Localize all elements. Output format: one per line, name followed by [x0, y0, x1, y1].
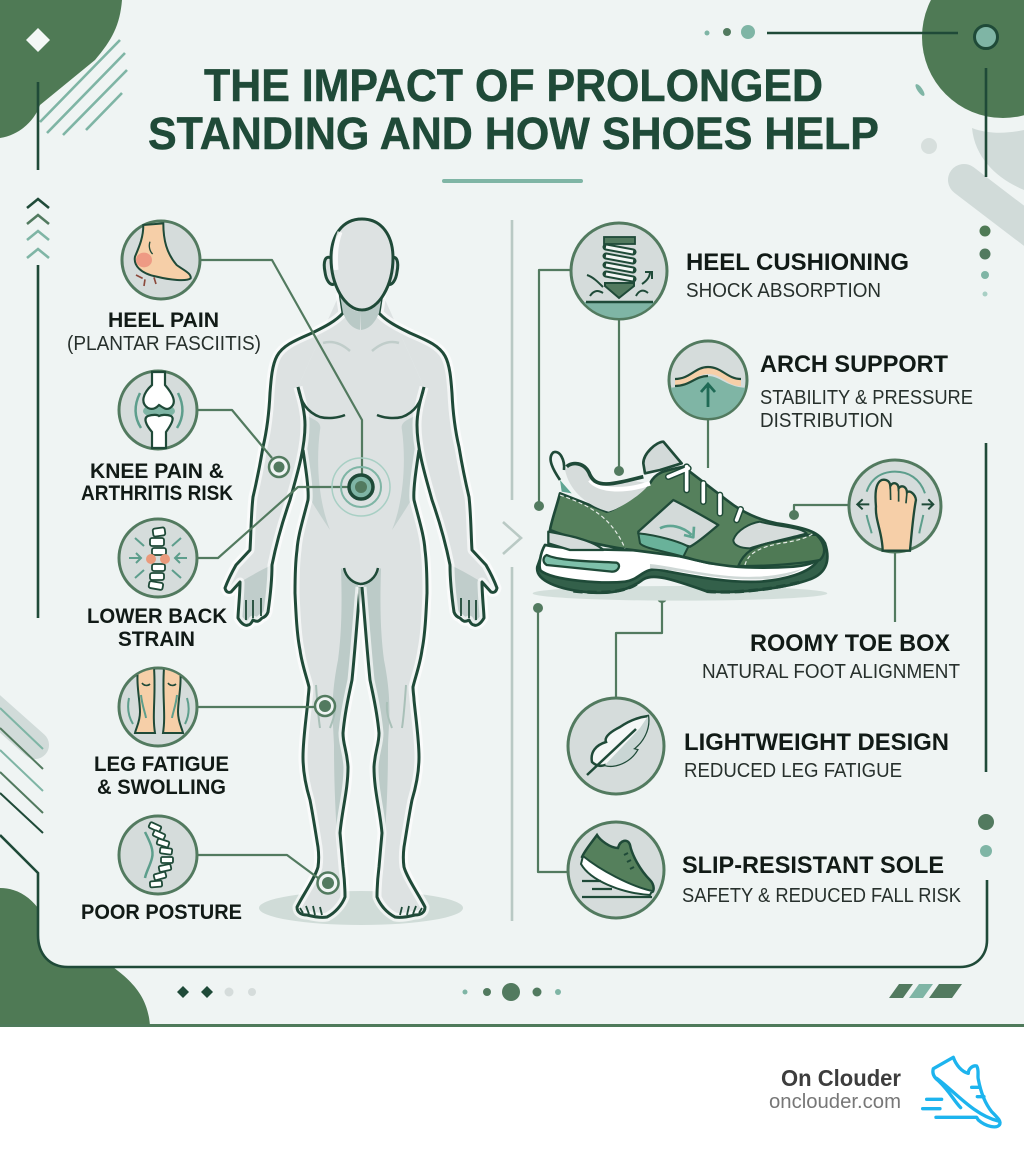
panel: slip-resistant sole: [568, 822, 962, 918]
label: SLIP-RESISTANT SOLE: [682, 852, 944, 879]
human figure: [225, 219, 497, 917]
chevrons: [27, 199, 49, 258]
icon: spring: [570, 223, 670, 322]
right dots: [978, 226, 994, 857]
frame: [0, 33, 987, 967]
panel: roomy toe box: NATURAL FOOT ALIGNMENT: [702, 661, 960, 683]
panel: lower back strain: STRAIN: [118, 628, 195, 651]
node: arm: [269, 457, 289, 477]
brand text: On Clouder: [781, 1065, 901, 1091]
title: THE IMPACT OF PROLONGED: [204, 60, 823, 111]
icon: heel: [122, 221, 200, 299]
ground shadow: [259, 891, 463, 925]
icon: legs: [119, 668, 197, 746]
label: POOR POSTURE: [81, 901, 242, 924]
title: STANDING AND HOW SHOES HELP: [148, 108, 879, 159]
panel: lower back strain: [87, 519, 227, 651]
brand text: [769, 1065, 901, 1113]
pain target: [332, 458, 390, 516]
panel: slip-resistant sole: SAFETY & REDUCED FALL RISK: [682, 885, 962, 907]
connectors left: [197, 260, 362, 878]
panel: arch support: DISTRIBUTION: [760, 410, 893, 432]
panel: poor posture: [81, 816, 242, 924]
icon: feather: [568, 698, 664, 794]
panel: lightweight design: REDUCED LEG FATIGUE: [684, 760, 902, 782]
panel: heel pain: [67, 221, 261, 355]
centre divider: [503, 220, 521, 921]
top left diamond: [26, 28, 50, 52]
panel: lightweight design: [568, 698, 949, 794]
panel: heel pain: (PLANTAR FASCIITIS): [67, 333, 261, 355]
icon: running shoe logo: [923, 1057, 1000, 1127]
panel: heel cushioning: [570, 223, 909, 322]
shoe illustration: [533, 442, 827, 601]
label: LIGHTWEIGHT DESIGN: [684, 729, 949, 756]
icon: arch: [665, 341, 750, 420]
top dots: [704, 25, 998, 48]
footer band: [0, 1024, 1024, 1154]
label: LOWER BACK: [87, 605, 227, 628]
node: ankle: [318, 872, 338, 894]
panel: roomy toe box: [702, 460, 960, 683]
label: ROOMY TOE BOX: [750, 630, 950, 657]
panel: heel cushioning: SHOCK ABSORPTION: [686, 280, 881, 302]
panel: knee pain: [81, 371, 233, 505]
panel: arch support: [665, 341, 973, 432]
label: ARCH SUPPORT: [760, 351, 948, 378]
brand text: onclouder.com: [769, 1091, 901, 1113]
label: LEG FATIGUE: [94, 753, 229, 776]
icon: knee joint: [119, 371, 197, 449]
bottom decorations: [177, 983, 962, 1001]
icon: foot: [849, 460, 941, 552]
panel: knee pain: ARTHRITIS RISK: [81, 482, 233, 505]
icon: small shoe: [568, 822, 664, 918]
icon: spine: [119, 519, 197, 597]
label: KNEE PAIN &: [90, 460, 224, 483]
panel: leg fatigue: & SWOLLING: [97, 776, 226, 799]
panel: leg fatigue: [94, 668, 229, 799]
connectors right: [533, 270, 895, 872]
title underline: [442, 179, 583, 183]
icon: curved spine: [119, 816, 197, 894]
node: knee: [315, 696, 335, 716]
label: HEEL CUSHIONING: [686, 249, 909, 276]
panel: arch support: STABILITY & PRESSURE: [760, 387, 973, 409]
label: HEEL PAIN: [108, 309, 219, 332]
title: [148, 60, 879, 159]
